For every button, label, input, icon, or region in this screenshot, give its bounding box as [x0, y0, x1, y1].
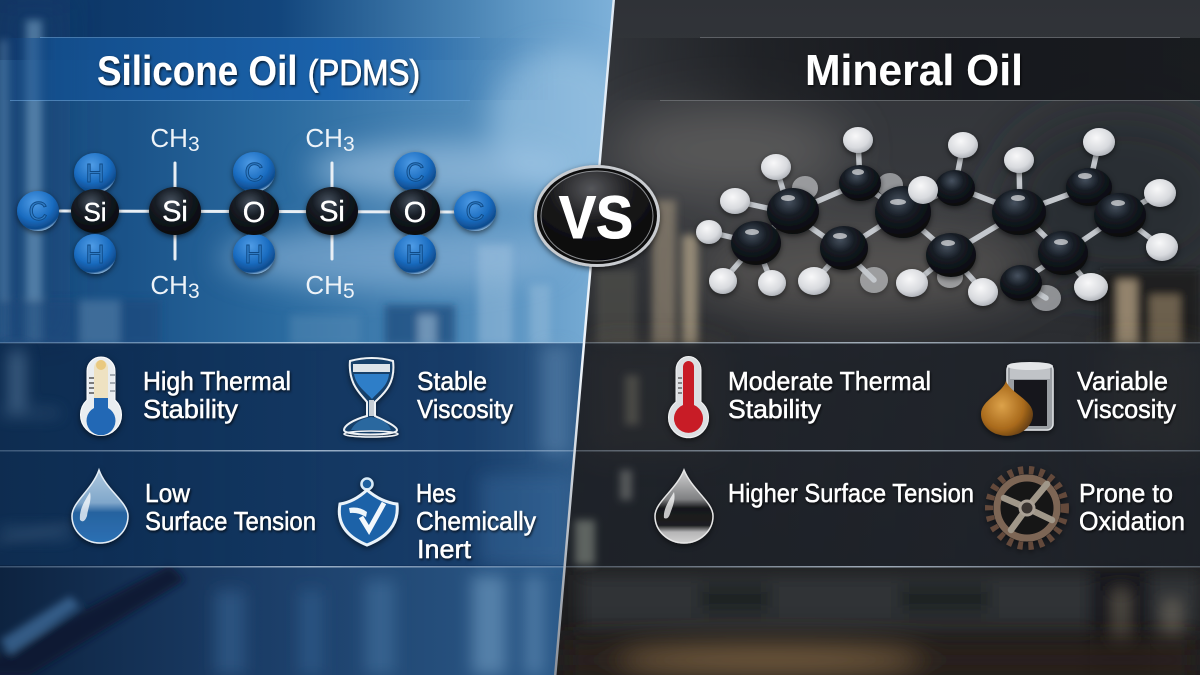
label: Stable	[417, 366, 487, 396]
label: Hes	[416, 478, 456, 508]
chart: PDMS molecule diagram	[17, 123, 496, 303]
icon: rusty gear	[989, 470, 1065, 546]
faded back atoms	[792, 173, 1061, 311]
icon: thermometer red	[668, 356, 708, 438]
label: Chemically	[416, 506, 536, 536]
heading: Silicone Oil (PDMS): Silicone Oil (PDMS)	[97, 47, 420, 94]
panel: silicone properties band	[0, 343, 620, 567]
item: High Thermal Stability	[80, 357, 291, 435]
heading: Mineral Oil: Mineral Oil	[805, 46, 1023, 95]
chart: mineral oil ball-and-stick molecule	[696, 127, 1178, 311]
chart: PDMS molecule diagram: C	[466, 196, 484, 226]
label: Oxidation	[1079, 506, 1185, 536]
chart: PDMS molecule diagram: CH	[150, 123, 188, 153]
label: Stability	[728, 394, 821, 424]
chart: PDMS molecule diagram: 3	[343, 133, 355, 156]
chart: PDMS molecule diagram: 3	[188, 133, 200, 156]
item: Prone to Oxidation	[989, 470, 1185, 546]
chart: PDMS molecule diagram: Si	[162, 196, 188, 228]
label: High Thermal	[143, 366, 291, 396]
label: Higher Surface Tension	[728, 478, 974, 508]
icon: blue drop	[72, 470, 128, 543]
chart: PDMS molecule diagram: Si	[319, 196, 345, 228]
chart: PDMS molecule diagram: CH	[305, 123, 343, 153]
item: Stable Viscosity	[344, 358, 513, 437]
item: Moderate Thermal Stability	[668, 356, 931, 438]
center divider	[554, 0, 615, 675]
chart: PDMS molecule diagram: CH	[150, 270, 188, 300]
chart: PDMS molecule diagram: C	[406, 157, 424, 187]
label: Viscosity	[1077, 394, 1176, 424]
item: Low Surface Tension	[72, 470, 316, 543]
label: Low	[145, 478, 190, 508]
chart: PDMS molecule diagram: H	[86, 158, 104, 188]
item: Higher Surface Tension	[655, 470, 974, 543]
label: Stability	[143, 394, 238, 424]
item: Variable Viscosity	[981, 362, 1176, 436]
label: Variable	[1077, 366, 1168, 396]
background: silicone side	[0, 0, 630, 675]
chart: PDMS molecule diagram: H	[406, 239, 424, 269]
chart: PDMS molecule diagram: 5	[343, 280, 355, 303]
label: Moderate Thermal	[728, 366, 931, 396]
chart: PDMS molecule diagram: O	[243, 197, 265, 229]
title band: mineral	[610, 38, 1200, 100]
icon: glass cylinder with oil drop	[981, 362, 1053, 436]
chart: PDMS molecule diagram: H	[86, 239, 104, 269]
chart: PDMS molecule diagram: CH	[305, 270, 343, 300]
label: Prone to	[1079, 478, 1173, 508]
icon: thermometer blue	[80, 357, 121, 435]
chart: PDMS molecule diagram: O	[404, 197, 426, 229]
icon: shield with check	[339, 478, 397, 545]
chart: PDMS molecule diagram: 3	[188, 280, 200, 303]
label: Inert	[417, 534, 472, 564]
background: mineral side	[550, 0, 1200, 675]
chart: PDMS molecule diagram: C	[29, 196, 47, 226]
chart: PDMS molecule diagram: Si	[83, 197, 107, 227]
title band: silicone	[14, 38, 500, 100]
chart: PDMS molecule diagram: C	[245, 157, 263, 187]
panel: mineral properties band	[550, 343, 1200, 567]
VS label: VS	[559, 184, 633, 251]
label: Surface Tension	[145, 506, 316, 536]
label: Viscosity	[417, 394, 513, 424]
icon: grey drop	[655, 470, 713, 543]
chart: PDMS molecule diagram: H	[245, 239, 263, 269]
VS badge	[534, 165, 660, 267]
item: Hes Chemically Inert	[339, 478, 536, 564]
icon: hourglass	[344, 358, 398, 437]
